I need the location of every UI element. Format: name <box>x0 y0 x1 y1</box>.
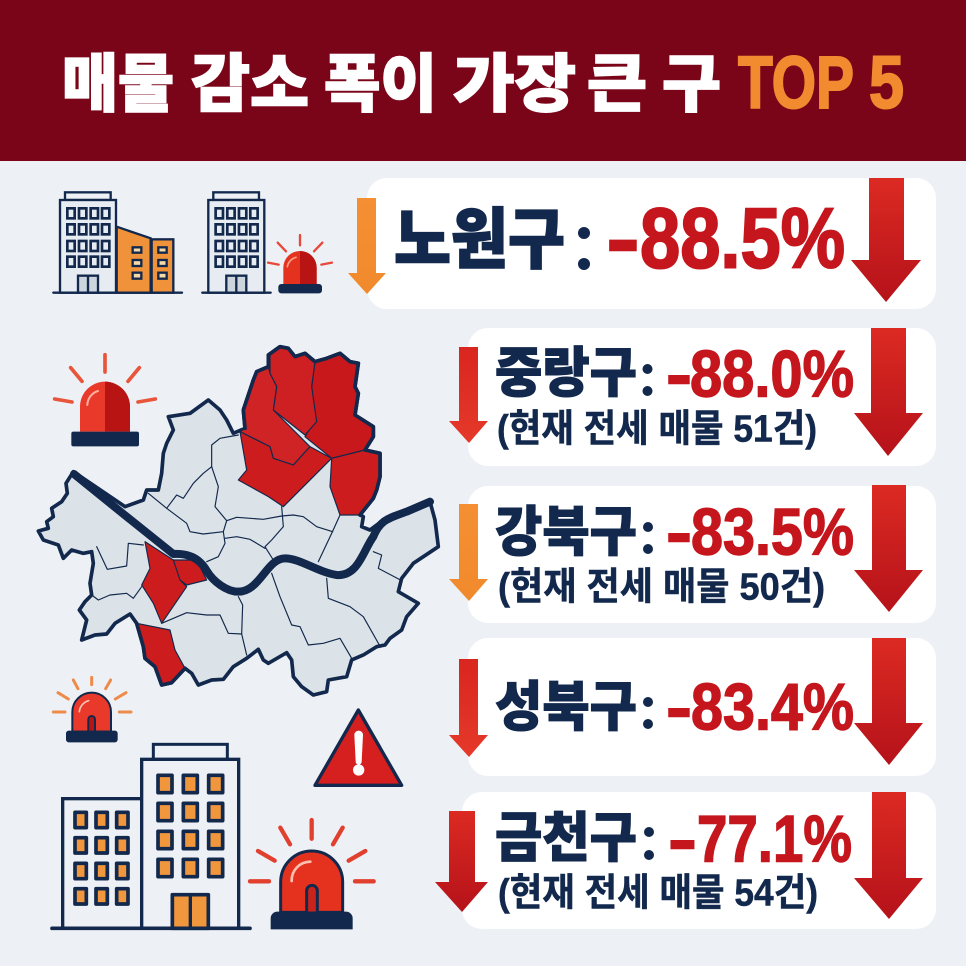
listing count: (현재 전세 매물 54건) <box>498 872 818 914</box>
icon: warning triangle <box>315 710 402 785</box>
arrow: orange down <box>348 198 386 294</box>
title: 구 <box>662 50 721 120</box>
colon <box>643 697 653 729</box>
panel: Nowon-gu <box>367 178 936 309</box>
title: 큰 <box>587 50 647 120</box>
title: 매물 <box>62 50 174 120</box>
district name: Jungnang-gu: 중랑구 <box>495 344 637 404</box>
title: 폭이 <box>324 50 437 120</box>
district name: Geumcheon-gu: 금천구 <box>495 808 637 868</box>
percentage: -88.0%: - <box>666 336 692 410</box>
listing count: (현재 전세 매물 51건) <box>497 408 817 450</box>
percentage: -83.5%: 83.5% <box>691 494 854 568</box>
icon: small siren top <box>268 235 332 293</box>
arrow: large red down <box>854 328 923 456</box>
district name: Seongbuk-gu: 성북구 <box>495 678 637 738</box>
percentage: -77.1%: - <box>668 802 697 876</box>
percentage: -83.4%: 83.4% <box>691 670 854 744</box>
arrow: large red down <box>854 638 923 765</box>
panel: Geumcheon-gu <box>462 792 936 929</box>
panel: Seongbuk-gu <box>468 638 936 776</box>
listing count: (현재 전세 매물 50건) <box>498 566 825 608</box>
district name: Nowon-gu: 노원구 <box>394 202 565 276</box>
percentage: -77.1%: 77.1% <box>697 802 852 876</box>
percentage: -83.4%: - <box>666 670 692 744</box>
icon: large siren <box>250 820 374 929</box>
percentage: -83.5%: - <box>666 494 692 568</box>
panel: Gangbuk-gu <box>468 485 936 623</box>
arrow: large red down <box>851 178 921 302</box>
arrow: large red down <box>854 485 923 612</box>
title: 가장 <box>453 50 576 120</box>
title: TOP <box>738 41 854 124</box>
Han river <box>74 474 430 592</box>
arrow: red down <box>449 659 488 757</box>
colon <box>643 522 653 554</box>
district name: Gangbuk-gu: 강북구 <box>495 502 637 562</box>
percentage: -88.5%: 88.5% <box>640 192 845 286</box>
icon: small orange-ray siren <box>53 677 131 742</box>
colon <box>578 227 590 270</box>
arrow: dark red down <box>435 811 488 912</box>
panel: Jungnang-gu <box>468 328 936 466</box>
colon <box>644 827 654 860</box>
icon: building with orange annex <box>53 192 182 293</box>
header banner <box>0 0 966 161</box>
arrow: orange down <box>449 504 488 601</box>
percentage: -88.5%: - <box>606 192 640 286</box>
icon: building <box>202 192 271 293</box>
colon <box>642 364 652 396</box>
percentage: -88.0%: 88.0% <box>690 336 854 410</box>
highlighted districts <box>137 347 380 685</box>
map base outline <box>38 347 438 695</box>
district borders <box>92 435 402 658</box>
title: 감소 <box>191 50 309 120</box>
arrow: large red down <box>854 792 923 919</box>
title <box>62 41 904 124</box>
title: 5 <box>869 41 904 124</box>
icon: siren above map <box>55 355 155 446</box>
icon: office buildings <box>52 744 250 928</box>
map: Seoul districts <box>38 347 438 695</box>
highlighted outer edges <box>137 347 380 685</box>
arrow: red down <box>449 347 488 443</box>
